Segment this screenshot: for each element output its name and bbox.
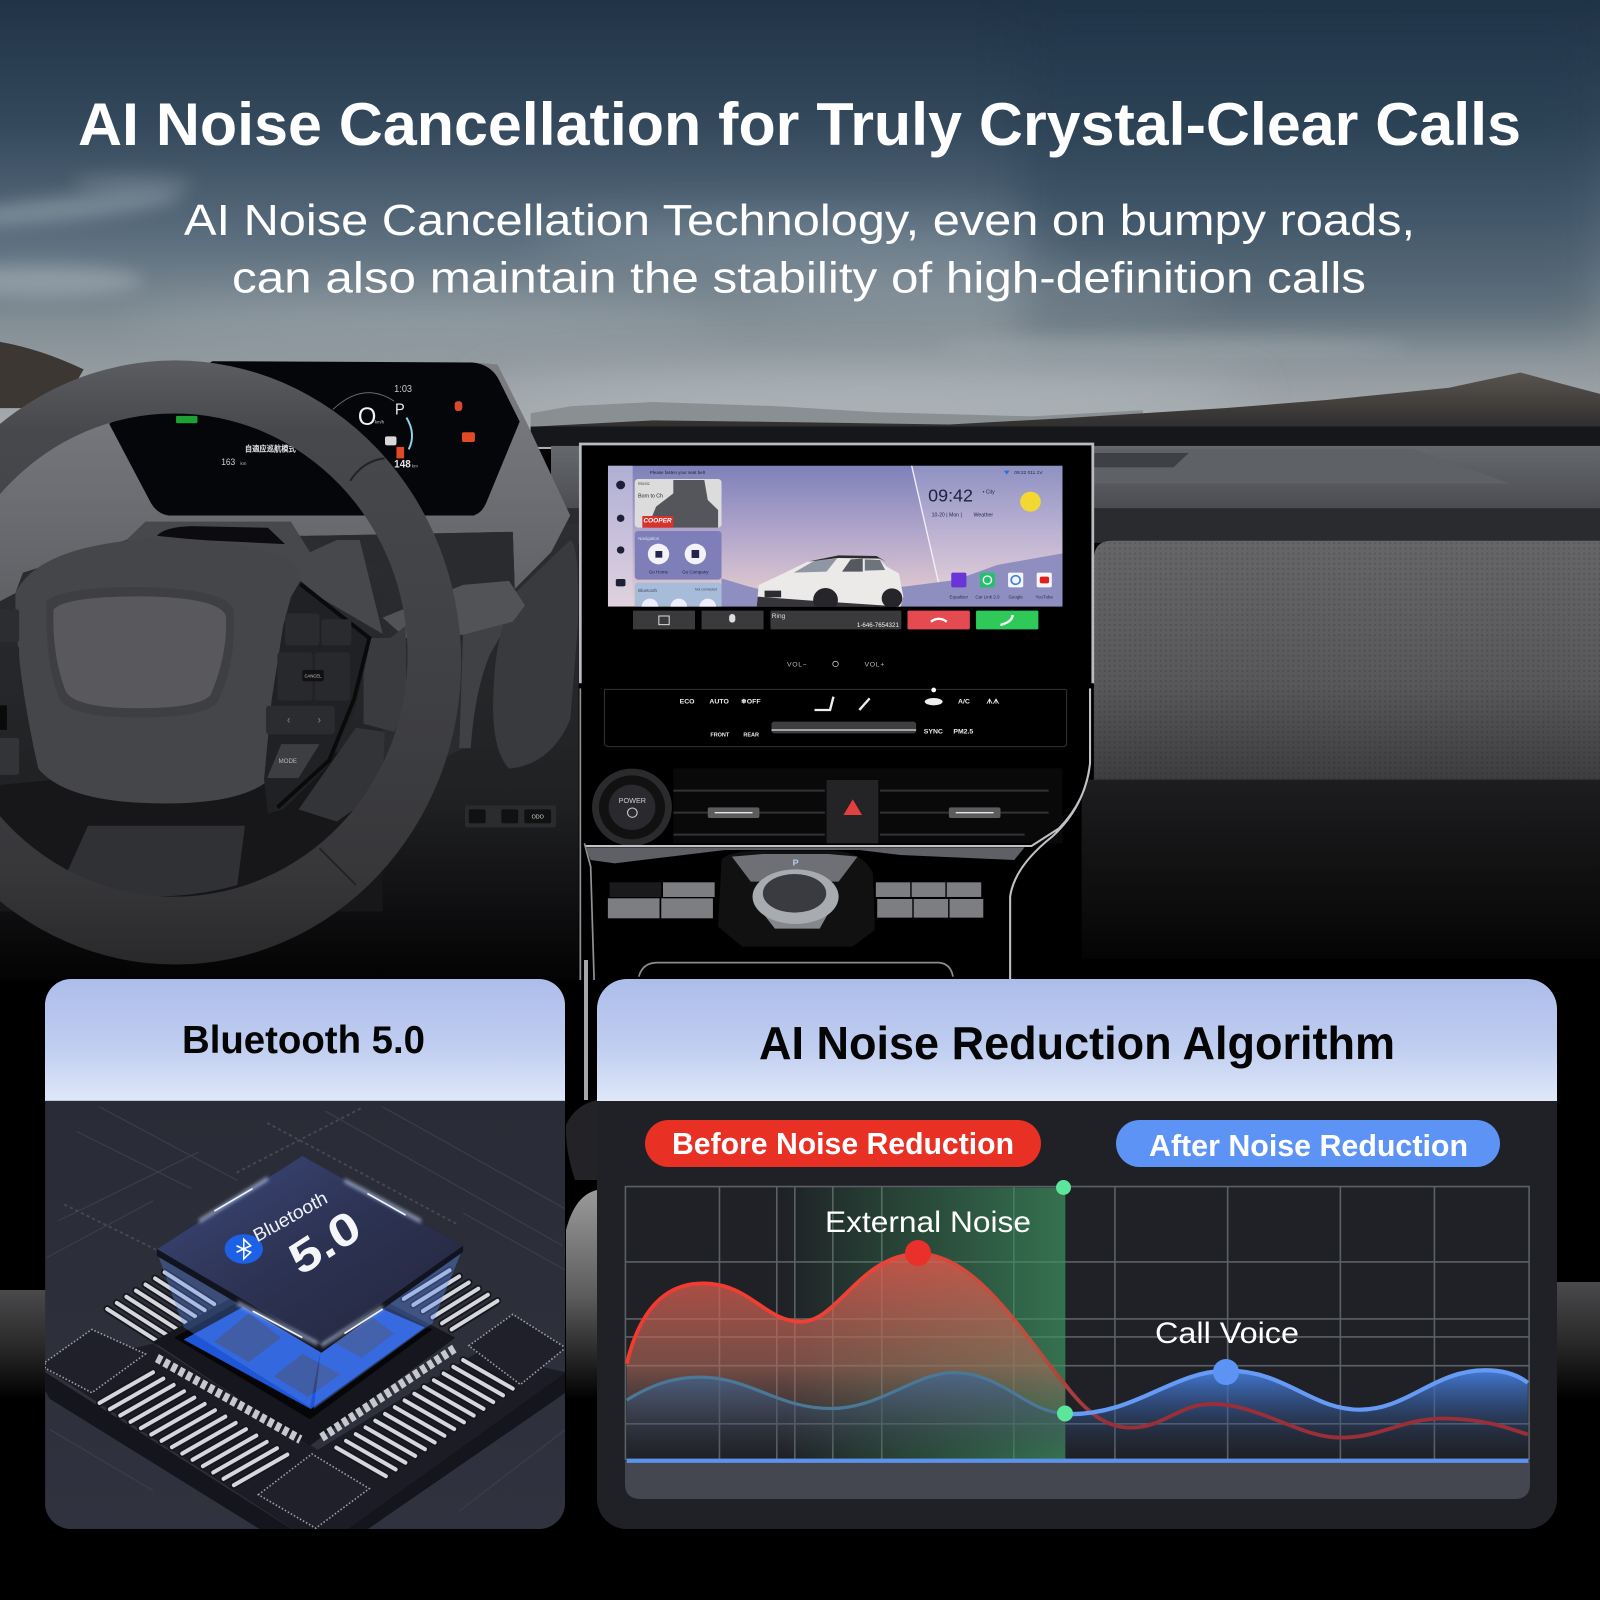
baseline	[627, 1459, 1528, 1463]
console base	[580, 688, 1093, 993]
chart base strip	[625, 1461, 1530, 1499]
climate touch panel: ECO	[680, 699, 695, 706]
screen wallpaper and UI: COOPER	[643, 517, 672, 524]
screen wallpaper and UI: Bluetooth	[638, 588, 658, 593]
instrument hood	[0, 362, 570, 601]
side reflections	[0, 960, 1600, 1400]
red noise line	[627, 1254, 1528, 1438]
green bottom marker	[1057, 1406, 1073, 1422]
screen wallpaper and UI: Car Link 2.0	[975, 595, 1000, 600]
metal pins	[100, 1270, 513, 1485]
odometer switches	[465, 805, 556, 827]
external noise label: External Noise	[825, 1206, 1031, 1239]
climate touch panel	[604, 688, 1067, 747]
badge: after noise reduction	[1116, 1120, 1500, 1167]
panel: AI Noise Reduction Algorithm	[597, 979, 1557, 1530]
screen wallpaper and UI: • City	[983, 489, 995, 495]
title: AI Noise Cancellation for Truly Crystal-Clear Calls	[78, 91, 1521, 158]
screen wallpaper and UI: Born to Ch	[638, 493, 663, 499]
panel: Bluetooth 5.0	[45, 979, 566, 1548]
drive mode buttons	[608, 882, 983, 918]
instrument cluster display	[109, 361, 520, 516]
hills and treeline	[0, 342, 1600, 447]
climate touch panel: REAR	[743, 733, 759, 739]
right steering wheel controls: ›	[318, 715, 321, 727]
column trim band	[459, 589, 515, 748]
gear selector: P	[793, 857, 799, 867]
blue voice line right	[1065, 1370, 1528, 1414]
lower shadow behind hub	[0, 748, 383, 911]
instrument cluster display: 1:03	[394, 384, 412, 395]
lower spoke	[63, 826, 245, 896]
climate touch panel: ❄OFF	[741, 698, 761, 706]
right steering wheel controls: CANCEL	[305, 673, 322, 679]
climate touch panel: AUTO	[709, 699, 729, 706]
grid	[625, 1187, 1529, 1459]
red noise fill	[626, 1257, 1066, 1438]
steering wheel rim	[0, 360, 461, 965]
panel header: Bluetooth 5.0	[45, 979, 565, 1101]
floating chip with Bluetooth label	[157, 1156, 463, 1409]
side chips	[45, 1314, 566, 1528]
right spoke	[364, 626, 406, 732]
screen wallpaper and UI: Music	[638, 481, 651, 486]
badge: after noise reduction: After Noise Reduction	[1149, 1128, 1468, 1163]
screen wallpaper and UI: Please fasten your seat belt	[650, 470, 706, 475]
volume touch labels: VOL+	[864, 661, 885, 668]
panel header: AI Noise Reduction Algorithm: AI Noise Reduction Algorithm	[759, 1017, 1395, 1069]
blue voice line left	[627, 1373, 1065, 1413]
instrument cluster display: O	[358, 403, 376, 431]
instrument cluster display: km/h	[375, 420, 385, 425]
badge: before noise reduction: Before Noise Reduction	[672, 1126, 1014, 1161]
panel header: Bluetooth 5.0: Bluetooth 5.0	[182, 1019, 425, 1062]
odometer switches: ODO	[532, 814, 544, 820]
chip illustration	[45, 1101, 566, 1548]
blue voice fill left	[626, 1374, 1065, 1442]
board edge shadow	[45, 1372, 565, 1529]
air vents	[673, 768, 1062, 843]
instrument cluster display: 163	[221, 457, 235, 467]
cup tray lip	[639, 963, 953, 977]
call voice label: Call Voice	[1155, 1317, 1299, 1350]
red marker	[905, 1240, 931, 1266]
panel header: AI Noise Reduction Algorithm	[597, 979, 1557, 1101]
interior behind wheel	[306, 532, 515, 789]
right steering wheel controls	[264, 581, 371, 814]
call control bar	[633, 611, 1038, 629]
climate touch panel: SYNC	[924, 728, 943, 735]
noise-cancel band	[810, 1188, 1066, 1459]
floating chip with Bluetooth label: Bluetooth	[250, 1187, 331, 1246]
hub shroud	[126, 522, 383, 634]
dashboard surfaces	[0, 446, 1600, 1600]
volume touch labels	[787, 661, 885, 668]
indicator stalk	[383, 581, 525, 638]
screen wallpaper and UI: 09:22 011.1V	[1014, 470, 1043, 476]
screen wallpaper and UI	[608, 466, 1062, 615]
screen wallpaper and UI: Navigation	[638, 536, 660, 541]
power button: POWER	[619, 797, 646, 805]
blue marker	[1213, 1359, 1239, 1385]
circuit board	[45, 1101, 566, 1548]
climate touch panel: FRONT	[710, 733, 730, 739]
socket and blue die	[154, 1299, 456, 1446]
subtitle: AI Noise Cancellation Technology, even on bumpy roads,	[184, 196, 1415, 245]
volume touch labels: VOL−	[787, 661, 808, 668]
center display unit	[580, 444, 1093, 683]
screen wallpaper and UI: 10-20 | Mon |	[932, 512, 962, 518]
driver area: wheel and cluster	[0, 360, 579, 980]
gear selector	[718, 851, 875, 947]
screen wallpaper and UI: YouTube	[1035, 595, 1054, 600]
subtitle	[184, 196, 1415, 302]
screen wallpaper and UI: 09:42	[928, 486, 973, 506]
climate touch panel: PM2.5	[953, 728, 973, 735]
chrome trim	[584, 688, 1090, 980]
blue voice fill right	[1066, 1372, 1528, 1447]
right steering wheel controls: ‹	[287, 715, 290, 727]
floating chip with Bluetooth label: 5.0	[281, 1201, 369, 1285]
call control bar: 1-646-7654321	[857, 622, 900, 629]
screen wallpaper and UI: Go Home	[649, 569, 669, 574]
dotted steering column trim	[493, 540, 578, 769]
call control bar: Ring	[772, 613, 786, 620]
instrument cluster display: P	[395, 401, 405, 419]
climate panel and center console	[580, 688, 1093, 993]
screen wallpaper and UI: Weather	[974, 512, 993, 518]
badge: before noise reduction	[645, 1120, 1041, 1167]
screen wallpaper and UI: Equalizer	[950, 595, 969, 600]
climate touch panel: ᗑᗑ	[986, 698, 1000, 706]
steering wheel hub	[15, 538, 300, 803]
bezel	[580, 444, 1093, 683]
green top marker	[1056, 1180, 1071, 1195]
left steering wheel controls	[0, 609, 19, 775]
car on wallpaper	[757, 555, 903, 612]
subtitle: can also maintain the stability of high-definition calls	[232, 254, 1366, 302]
lower cockpit backdrop	[0, 524, 579, 980]
power button	[592, 769, 672, 846]
instrument cluster display: km	[412, 463, 418, 469]
waveform chart	[625, 1187, 1529, 1463]
climate touch panel: A/C	[958, 699, 970, 706]
instrument cluster display: 148	[394, 459, 411, 470]
instrument cluster display: 自適应巡航模式	[245, 443, 296, 454]
right steering wheel controls: MODE	[279, 758, 297, 765]
panel body	[597, 1100, 1557, 1530]
instrument cluster display: km	[240, 461, 246, 467]
hazard button	[827, 780, 878, 843]
screen wallpaper and UI: Google	[1008, 595, 1023, 600]
screen wallpaper and UI: Go Company	[682, 569, 709, 574]
screen wallpaper and UI: Not connected	[695, 588, 717, 592]
